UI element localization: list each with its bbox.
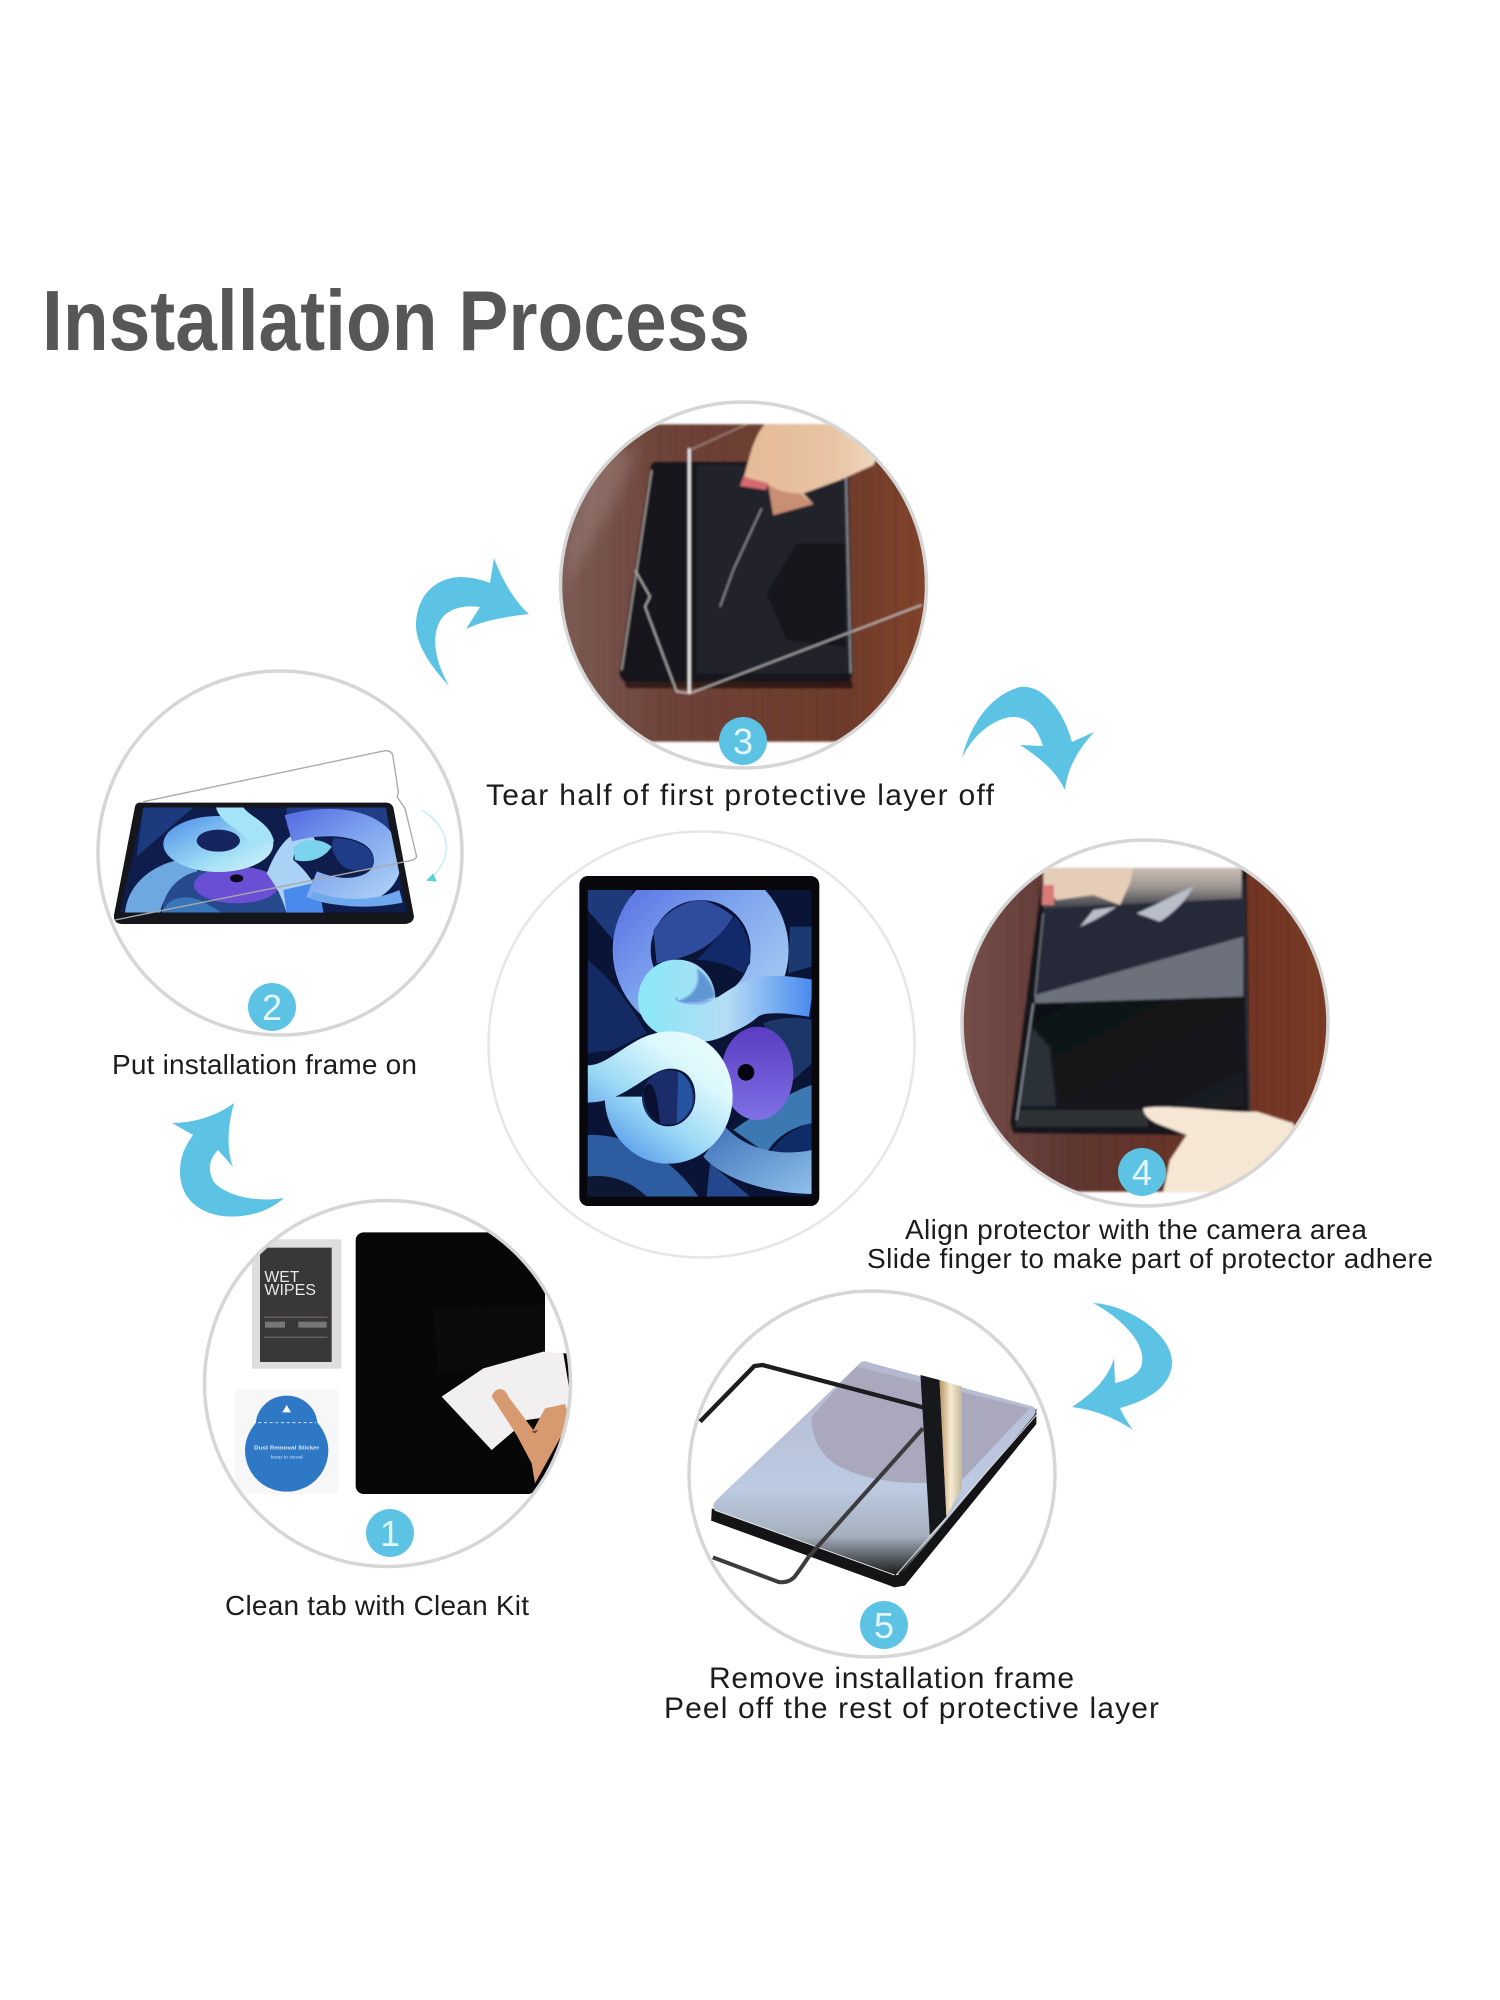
badge: step 3: [719, 717, 767, 765]
ring: step 3 outline: [560, 402, 926, 768]
caption: step 4: [867, 1214, 1433, 1274]
wet wipes packet: WIPES: [264, 1282, 316, 1299]
caption: step 2: Put installation frame on: [112, 1049, 417, 1080]
caption: step 3: Tear half of first protective layer off: [486, 779, 995, 812]
panel: step 1 clean tab with clean kit: [204, 1200, 580, 1566]
photo: wet wipes, dust sticker and wiping the tablet: [245, 1232, 569, 1494]
badge: step 4: 4: [1132, 1152, 1152, 1193]
badge: step 2: [248, 983, 296, 1031]
arrow: step 4 to step 5: [1072, 1303, 1172, 1430]
badge: step 5: [860, 1601, 908, 1649]
caption: step 5: Remove installation frame: [709, 1662, 1074, 1695]
badge: step 1: [366, 1509, 414, 1557]
photo: peeling the layer over a tablet on a wooden table: [553, 424, 937, 742]
caption: step 4: Align protector with the camera area: [905, 1214, 1367, 1245]
icon: tablet in perspective with frame: [114, 751, 446, 924]
ring: step 1 outline: [204, 1200, 570, 1566]
arrow: step 1 to step 2: [172, 1103, 284, 1217]
dust removal sticker: keep to visual: [271, 1455, 303, 1460]
caption: step 5: Peel off the rest of protective layer: [664, 1692, 1159, 1725]
panel: step 4 align protector: [960, 840, 1333, 1206]
panel: step 2 put installation frame on: [98, 671, 462, 1035]
dust removal sticker: Dust Removal Sticker: [254, 1446, 319, 1452]
badge: step 2: 2: [262, 987, 282, 1028]
arrow: step 3 to step 4: [962, 687, 1094, 790]
panel: step 3 tear protective layer: [553, 402, 937, 768]
icon: tablet front view with wallpaper: [579, 876, 819, 1206]
panel: step 5 remove installation frame: [689, 1291, 1055, 1657]
caption: step 5: [664, 1662, 1159, 1725]
badge: step 4: [1118, 1148, 1166, 1196]
ring: step 4 outline: [962, 840, 1328, 1206]
dust removal sticker: [245, 1396, 328, 1492]
arrow: step 2 to step 3: [416, 558, 529, 686]
installation frame outline: [115, 751, 417, 920]
wipe and hand: [442, 1294, 569, 1494]
wet wipes packet: WET: [264, 1269, 300, 1286]
icon: curved rotation arrow: [422, 810, 446, 882]
photo: aligning and pressing the protector: [960, 868, 1333, 1192]
caption: step 4: Slide finger to make part of protector adhere: [867, 1243, 1433, 1274]
black tablet: [356, 1232, 569, 1494]
infographic canvas: [47, 288, 1432, 1724]
badge: step 5: 5: [874, 1605, 894, 1646]
badge: step 1: 1: [380, 1513, 400, 1554]
photo: tablet with black frame lifted: [700, 1361, 1036, 1587]
lifted black frame: [700, 1365, 923, 1582]
wet wipes packet: [252, 1239, 341, 1369]
title: Installation Process: [42, 274, 750, 369]
badge: step 3: 3: [733, 721, 753, 762]
caption: step 1: Clean tab with Clean Kit: [225, 1590, 529, 1621]
panel: centre tablet: [488, 832, 914, 1258]
